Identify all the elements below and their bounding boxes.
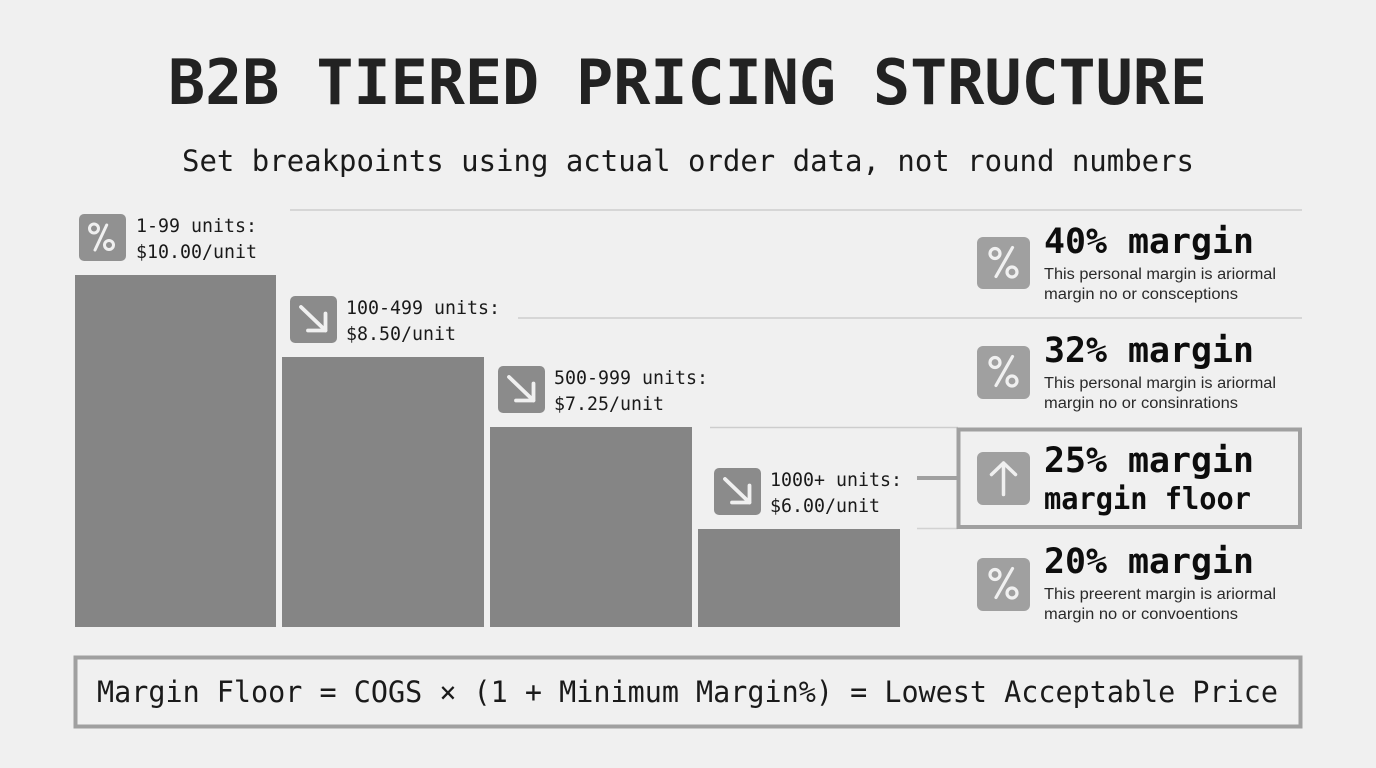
margin row: 20% xyxy=(977,542,1276,623)
tier label: 1-99 units xyxy=(79,214,257,263)
margin floor label: margin floor xyxy=(1044,482,1251,517)
margin note: This personal margin is ariormal xyxy=(1044,375,1276,392)
tier text: $6.00/unit xyxy=(770,495,880,517)
icon: percent xyxy=(977,558,1030,611)
tier label: 1000+ units xyxy=(714,468,902,517)
icon: up arrow xyxy=(977,452,1030,505)
margin note: margin no or consinrations xyxy=(1044,395,1238,412)
bar chart: price tiers xyxy=(75,275,900,627)
bar: 1-99 units xyxy=(75,275,276,627)
icon: percent xyxy=(79,214,126,261)
tier text: 1-99 units: xyxy=(136,215,257,237)
bar: 500-999 units xyxy=(490,427,692,627)
margin note: This personal margin is ariormal xyxy=(1044,266,1276,283)
margin note: This preerent margin is ariormal xyxy=(1044,586,1276,603)
icon: percent xyxy=(977,346,1030,399)
margin heading: 40% margin xyxy=(1044,222,1254,262)
margin row: 32% xyxy=(977,331,1276,412)
margin note: margin no or consceptions xyxy=(1044,286,1238,303)
formula box xyxy=(76,658,1300,726)
tier text: $7.25/unit xyxy=(554,393,664,415)
margin note: margin no or convoentions xyxy=(1044,606,1238,623)
tier text: 500-999 units: xyxy=(554,367,708,389)
tier text: 1000+ units: xyxy=(770,469,902,491)
tier label: 500-999 units xyxy=(498,366,708,415)
tier text: $8.50/unit xyxy=(346,323,456,345)
title: B2B TIERED PRICING STRUCTURE xyxy=(168,46,1207,119)
bar: 100-499 units xyxy=(282,357,484,627)
tier text: 100-499 units: xyxy=(346,297,500,319)
formula text: Margin Floor = COGS × (1 + Minimum Margin%) = Lowest Acceptable Price xyxy=(97,675,1278,709)
tier label: 100-499 units xyxy=(290,296,500,345)
icon: down-right arrow xyxy=(498,366,545,413)
margin heading: 25% margin xyxy=(1044,441,1254,481)
margin heading: 32% margin xyxy=(1044,331,1254,371)
subtitle: Set breakpoints using actual order data, not round numbers xyxy=(182,144,1194,178)
icon: down-right arrow xyxy=(290,296,337,343)
bar: 1000+ units xyxy=(698,529,900,627)
icon: percent xyxy=(977,237,1030,289)
connector to margin floor xyxy=(917,476,958,480)
icon: down-right arrow xyxy=(714,468,761,515)
tier text: $10.00/unit xyxy=(136,241,257,263)
margin floor callout xyxy=(958,430,1300,527)
margin row: 40% xyxy=(977,222,1276,303)
margin heading: 20% margin xyxy=(1044,542,1254,582)
